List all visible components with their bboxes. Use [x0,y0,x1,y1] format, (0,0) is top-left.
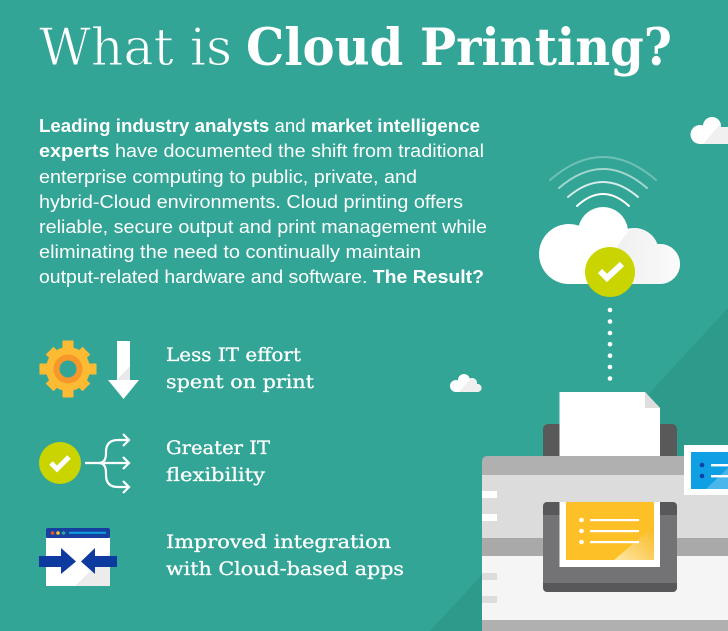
intro text block: eliminating the need to continually maintain [39,242,421,262]
title: What is [39,19,232,78]
wifi waves [550,157,656,206]
input paper [560,392,660,456]
benefit label: flexibility [166,438,271,486]
printer [482,392,728,631]
side display card [684,445,728,495]
title [39,18,672,78]
intro text block: output-related hardware and software. The Result? [39,267,484,287]
output page [560,502,660,567]
icon: down arrow [108,341,139,399]
benefit label: integration: Improved integration [166,532,391,553]
intro text block [39,116,487,287]
icon: branching arrows [85,434,129,493]
icon: small cloud top right [690,117,728,144]
printer body [482,456,728,631]
icon: small cloud middle [450,374,482,392]
benefit label: flexibility: flexibility [166,465,266,486]
benefit label: less IT effort [166,345,315,393]
benefit label: integration [166,532,404,580]
benefit label: less IT effort: spent on print [166,372,315,393]
intro text block: Leading industry analysts and market intelligence [39,116,480,136]
benefit label: integration: with Cloud-based apps [166,559,404,580]
icon: cloud with check and wifi waves [535,157,685,297]
check badge [585,247,635,297]
background diagonal shade [430,308,728,631]
dotted connector [608,308,612,381]
paper tray back [543,424,677,464]
benefit label: flexibility: Greater IT [166,438,271,459]
icon: browser window with converging arrows [39,528,117,586]
title: Cloud Printing? [246,18,672,78]
icon: gear [40,340,96,398]
intro text block: experts have documented the shift from traditional [39,141,484,161]
icon: check badge [39,442,81,484]
intro text block: hybrid-Cloud environments. Cloud printing offers [39,192,463,212]
cloud shape [539,207,680,284]
output slot [543,502,677,592]
benefit label: less IT effort: Less IT effort [166,345,302,366]
intro text block: reliable, secure output and print management while [39,217,487,237]
intro text block: enterprise computing to public, private, and [39,167,417,187]
